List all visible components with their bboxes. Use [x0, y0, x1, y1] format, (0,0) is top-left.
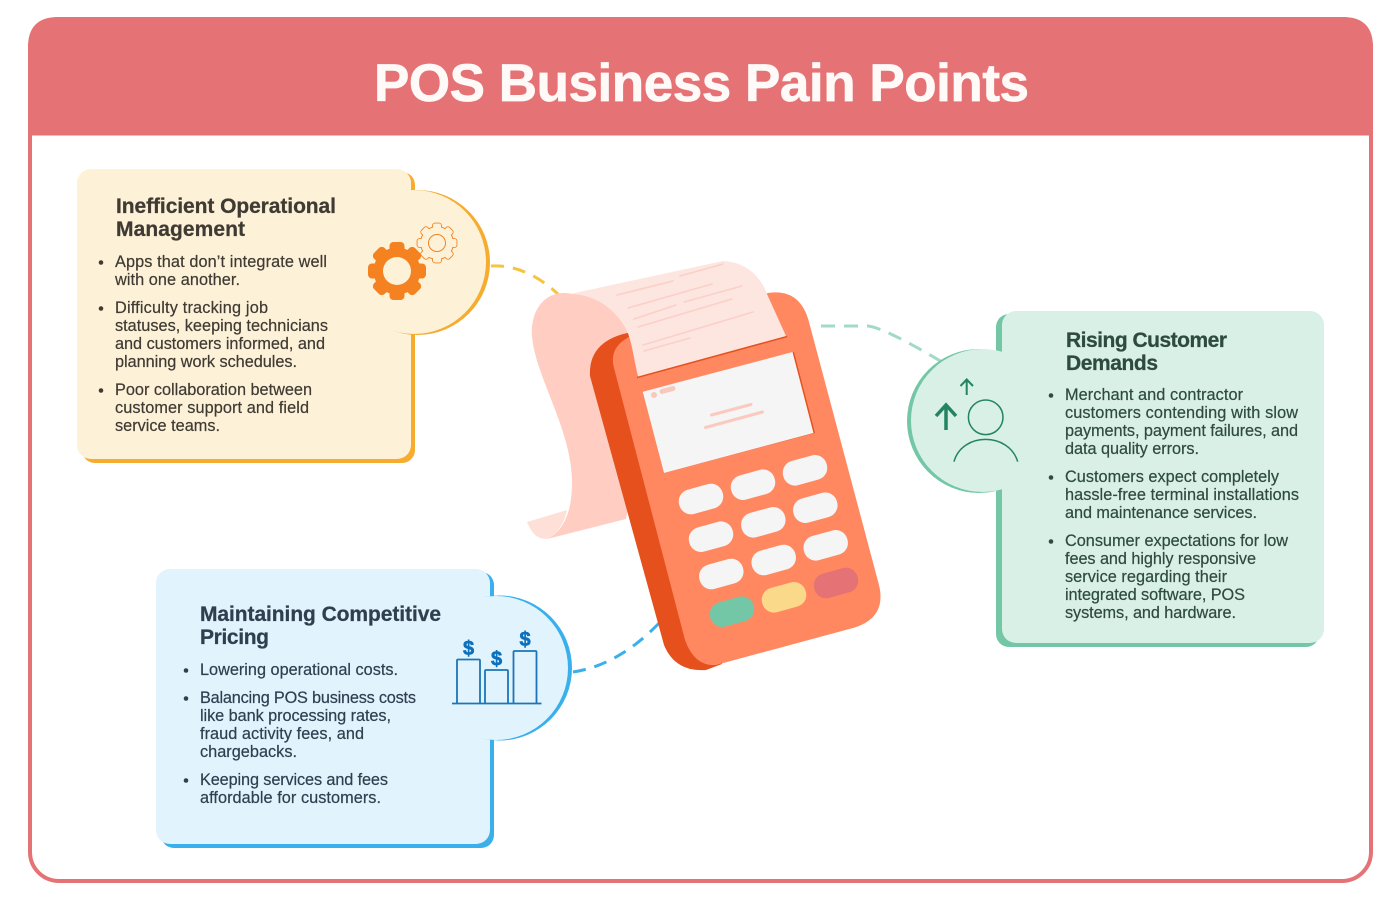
bullet list: chargebacks. — [200, 743, 297, 761]
heading: Maintaining Competitive — [200, 603, 441, 626]
bullet list: fraud activity fees, and — [200, 725, 364, 743]
heading: Rising Customer — [1066, 329, 1227, 352]
bullet list — [1049, 386, 1299, 622]
bullet list: Keeping services and fees — [200, 771, 388, 789]
bullet list: Poor collaboration between — [115, 381, 312, 399]
bullet list: Consumer expectations for low — [1065, 532, 1288, 550]
bullet list: affordable for customers. — [200, 789, 381, 807]
heading: Inefficient Operational — [116, 195, 336, 218]
connector: blue dashed — [573, 620, 662, 672]
bullet list: like bank processing rates, — [200, 707, 391, 725]
bullet list: Balancing POS business costs — [200, 689, 416, 707]
bullet list: payments, payment failures, and — [1065, 422, 1298, 440]
bullet list: integrated software, POS — [1065, 586, 1245, 604]
bullet list: with one another. — [114, 271, 240, 289]
bullet list: service regarding their — [1065, 568, 1228, 586]
icon: bars with dollar signs — [452, 629, 542, 704]
bullet list: systems, and hardware. — [1065, 604, 1236, 622]
bullet list: data quality errors. — [1065, 440, 1199, 458]
terminal screen — [643, 352, 815, 473]
bullet list — [184, 661, 416, 807]
bullet list: and customers informed, and — [115, 335, 325, 353]
header band — [28, 17, 1373, 136]
heading: Management — [116, 218, 245, 241]
bullet list: and maintenance services. — [1065, 504, 1257, 522]
bullet list: customer support and field — [115, 399, 309, 417]
connector: teal dashed — [821, 326, 942, 362]
bullet list: Apps that don’t integrate well — [115, 253, 327, 271]
icon: bars with dollar signs: $ — [491, 648, 502, 670]
heading: Demands — [1066, 352, 1158, 375]
icon: solid gear — [368, 242, 426, 300]
keypad — [676, 452, 851, 592]
bullet list: statuses, keeping technicians — [115, 317, 328, 335]
receipt slot — [637, 336, 787, 378]
icon: gears — [368, 224, 456, 300]
receipt text lines — [617, 264, 753, 351]
action buttons — [707, 565, 861, 630]
bullet list: planning work schedules. — [115, 353, 297, 371]
terminal side — [590, 332, 722, 670]
illustration: POS terminal — [527, 261, 881, 670]
icon: outline gear — [418, 224, 456, 262]
panel: maintaining competitive pricing — [156, 569, 572, 848]
bullet list: Customers expect completely — [1065, 468, 1280, 486]
panel: inefficient operational management — [77, 169, 490, 463]
bullet list: Lowering operational costs. — [200, 661, 398, 679]
bullet list: hassle-free terminal installations — [1065, 486, 1299, 504]
icon: bars with dollar signs: $ — [463, 638, 474, 660]
icon: bars with dollar signs: $ — [519, 629, 531, 651]
heading — [116, 195, 336, 241]
bullet list: Merchant and contractor — [1065, 386, 1244, 404]
heading — [200, 603, 441, 649]
panel: rising customer demands — [907, 311, 1324, 647]
icon: customer with rising arrows — [936, 380, 1018, 462]
heading: Pricing — [200, 626, 269, 649]
terminal face — [613, 292, 881, 665]
receipt front — [570, 261, 786, 376]
receipt back curl — [532, 293, 650, 539]
receipt tail — [527, 510, 567, 539]
bullet list: customers contending with slow — [1065, 404, 1298, 422]
connector: yellow dashed — [491, 266, 562, 298]
bullet list: fees and highly responsive — [1065, 550, 1256, 568]
title: POS Business Pain Points — [374, 54, 1029, 113]
bullet list: Difficulty tracking job — [115, 299, 268, 317]
heading — [1066, 329, 1227, 375]
bullet list: service teams. — [115, 417, 220, 435]
bullet list — [99, 253, 328, 435]
